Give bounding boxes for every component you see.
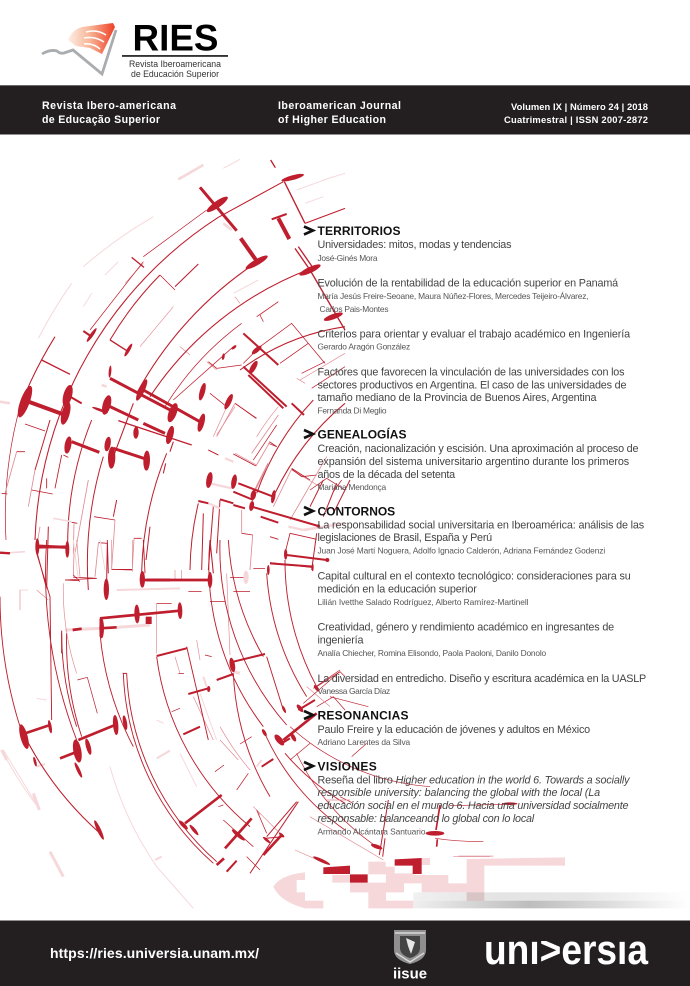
centre arcs and bars <box>190 400 350 570</box>
articles: Adriano Larentes da Silva <box>318 737 411 747</box>
articles: Factores que favorecen la vinculación de las universidades con los <box>318 366 625 378</box>
logo wordmark: RIES <box>132 18 218 58</box>
portuguese title: Revista Ibero-americana <box>42 100 176 112</box>
lower arcs and radial bars <box>0 540 353 908</box>
website url: https://ries.universia.unam.mx/ <box>50 945 259 961</box>
articles: tamaño mediano de la Provincia de Buenos Aires, Argentina <box>318 392 596 404</box>
articles <box>318 774 630 836</box>
icon: UNAM crest <box>394 930 426 964</box>
issue details: Volumen IX | Número 24 | 2018 <box>511 101 648 112</box>
articles: Universidades: mitos, modas y tendencias <box>318 239 512 251</box>
section: Visiones <box>304 760 630 836</box>
articles: responsible university: balancing the global with the local (La <box>318 787 600 799</box>
articles: Fernanda Di Meglio <box>318 406 387 416</box>
heading: TERRITORIOS <box>318 224 400 238</box>
heading: CONTORNOS <box>318 504 395 518</box>
articles: Vanessa García Díaz <box>318 686 390 696</box>
section: Resonancias <box>304 708 590 747</box>
articles: José-Ginés Mora <box>318 253 378 263</box>
articles: Evolución de la rentabilidad de la educación superior en Panamá <box>318 278 618 290</box>
footer band <box>0 920 690 986</box>
arcs behind right text and pixel blocks <box>265 670 690 908</box>
articles <box>318 239 630 416</box>
pixel blocks grey <box>413 892 690 908</box>
english title <box>278 100 401 126</box>
header band <box>0 85 690 134</box>
portuguese title <box>42 100 176 126</box>
section: Genealogías <box>304 426 638 492</box>
articles: Armando Alcántara Santuario <box>318 826 426 836</box>
heading: GENEALOGÍAS <box>318 426 406 442</box>
pixel blocks red <box>323 856 493 883</box>
arrow <box>304 762 313 770</box>
articles: Analía Chiecher, Romina Elisondo, Paola Paoloni, Danilo Donolo <box>318 648 547 658</box>
upper arcs and radial bars <box>0 159 345 540</box>
articles: Capital cultural en el contexto tecnológico: consideraciones para su <box>318 570 631 582</box>
articles: educación social en el mundo 6. Hacia una universidad socialmente <box>318 800 628 812</box>
iisue label: iisue <box>393 966 427 982</box>
articles: responsable: balanceando lo global con lo local <box>318 813 535 825</box>
english title: Iberoamerican Journal <box>278 100 401 112</box>
logo subtitle: de Educación Superior <box>131 69 219 79</box>
articles: legislaciones de Brasil, España y Perú <box>318 532 492 544</box>
radial red arc graphic <box>0 159 690 908</box>
portuguese title: de Educação Superior <box>42 114 160 126</box>
pixel blocks pink <box>273 857 565 908</box>
section: Contornos <box>304 504 646 696</box>
articles: años de la década del setenta <box>318 469 455 481</box>
heading: VISIONES <box>318 760 377 774</box>
articles: Gerardo Aragón González <box>318 342 410 352</box>
articles: María Jesús Freire-Seoane, Maura Núñez-Flores, Mercedes Teijeiro-Álvarez, <box>318 291 588 301</box>
articles: Reseña del libro Higher education in the world 6. Towards a socially <box>318 774 630 786</box>
articles: Juan José Martí Noguera, Adolfo Ignacio Calderón, Adriana Fernández Godenzi <box>318 546 605 556</box>
logo RIES <box>42 18 228 79</box>
articles: Creatividad, género y rendimiento académico en ingresantes de <box>318 622 614 634</box>
issue details <box>504 101 648 125</box>
english title: of Higher Education <box>278 114 386 126</box>
arrow <box>304 711 313 719</box>
articles: expansión del sistema universitario argentino durante los primeros <box>318 456 630 468</box>
arrow <box>304 430 313 438</box>
articles: Criterios para orientar y evaluar el trabajo académico en Ingeniería <box>318 328 630 340</box>
articles <box>318 443 638 492</box>
articles: Carlos Pais-Montes <box>320 304 388 314</box>
articles: Paulo Freire y la educación de jóvenes y adultos en México <box>318 724 590 736</box>
articles: ingeniería <box>318 634 364 646</box>
articles <box>318 520 646 696</box>
articles: La responsabilidad social universitaria en Iberoamérica: análisis de las <box>318 520 645 532</box>
logo subtitle <box>129 59 221 79</box>
articles: sectores productivos en Argentina. El caso de las universidades de <box>318 380 626 392</box>
issue details: Cuatrimestral | ISSN 2007-2872 <box>504 114 648 125</box>
universia logo: uni>ersia <box>484 926 649 973</box>
section: Territorios <box>304 224 630 416</box>
left mid arcs and brackets <box>0 420 170 590</box>
articles: Mariana Mendonça <box>318 482 387 492</box>
articles <box>318 724 590 747</box>
logo subtitle: Revista Iberoamericana <box>129 59 221 69</box>
articles: La diversidad en entredicho. Diseño y escritura académica en la UASLP <box>318 673 646 685</box>
arrow <box>304 507 313 515</box>
icon: open book <box>42 23 116 74</box>
heading: RESONANCIAS <box>318 708 408 722</box>
articles: Lilián Ivetthe Salado Rodríguez, Alberto Ramírez-Martinell <box>318 597 529 607</box>
articles: medición en la educación superior <box>318 584 477 596</box>
articles: Creación, nacionalización y escisión. Una aproximación al proceso de <box>318 443 638 455</box>
arrow <box>304 226 313 234</box>
